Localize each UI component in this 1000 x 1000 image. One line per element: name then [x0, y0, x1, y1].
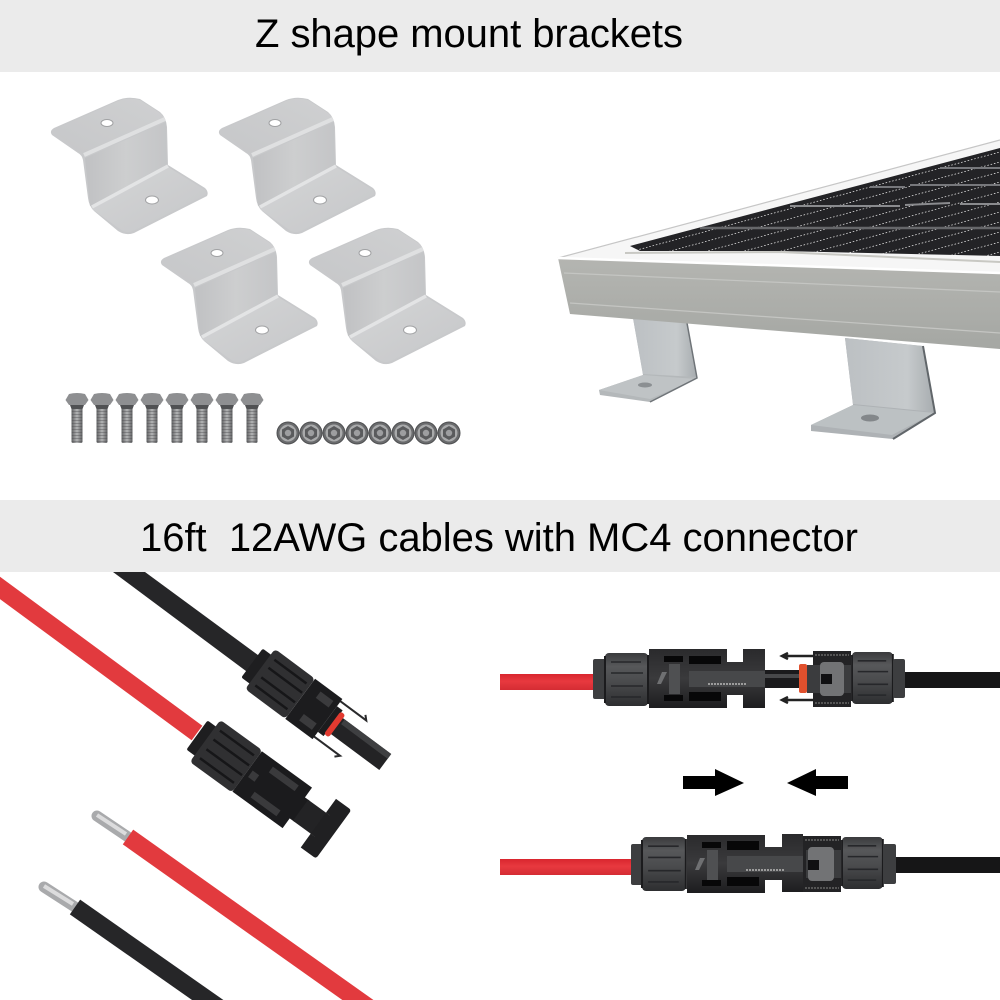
right nut: [842, 837, 896, 889]
left nut: [631, 837, 686, 891]
heading banner: Z shape mount brackets: Z shape mount brackets: [255, 12, 683, 56]
right nut: [852, 652, 905, 704]
stripped black wire: [44, 886, 222, 1000]
panel frame top: [558, 140, 1000, 274]
stripped red wire: [97, 815, 372, 1000]
red cable stub: [500, 674, 595, 690]
MC4 connector pair, separated: [500, 649, 1000, 708]
red cable stub: [500, 859, 634, 875]
pin and orange ring: [765, 653, 813, 703]
bracket foot right: [811, 338, 935, 439]
icon: four Z shape brackets: [51, 98, 466, 364]
left nut: [593, 653, 648, 706]
arrow pointing left: [787, 769, 848, 796]
orange ring: [324, 711, 345, 737]
right housing: [803, 836, 841, 892]
solar cells: [630, 148, 1000, 256]
arrow pointing right: [683, 769, 744, 796]
heading banner: cables with MC4 connector: [0, 500, 1000, 572]
red cable: [0, 582, 197, 733]
locking barbs: [310, 697, 369, 759]
icon: eight bolts: [66, 393, 264, 443]
MC4 male connector, angled: [236, 642, 401, 783]
heading banner: cables with MC4 connector: 16ft 12AWG cables with MC4 connector: [140, 516, 858, 560]
black cable: [113, 572, 262, 674]
heading banner: Z shape mount brackets: [0, 0, 1000, 72]
bracket foot left: [599, 318, 697, 402]
icon: eight flange nuts: [277, 422, 460, 444]
black cable stub: [903, 672, 1000, 688]
MC4 female connector, angled: [179, 711, 351, 859]
left housing: [687, 834, 803, 893]
panel frame front side: [558, 258, 1000, 349]
contact pin: [326, 715, 391, 770]
left housing: [649, 649, 765, 708]
glass reflections: [625, 252, 1000, 262]
MC4 connector pair, joined: [500, 834, 1000, 893]
right housing: [807, 651, 851, 707]
solar panel corner with mounted brackets: [558, 140, 1000, 439]
black cable stub: [894, 857, 1000, 873]
